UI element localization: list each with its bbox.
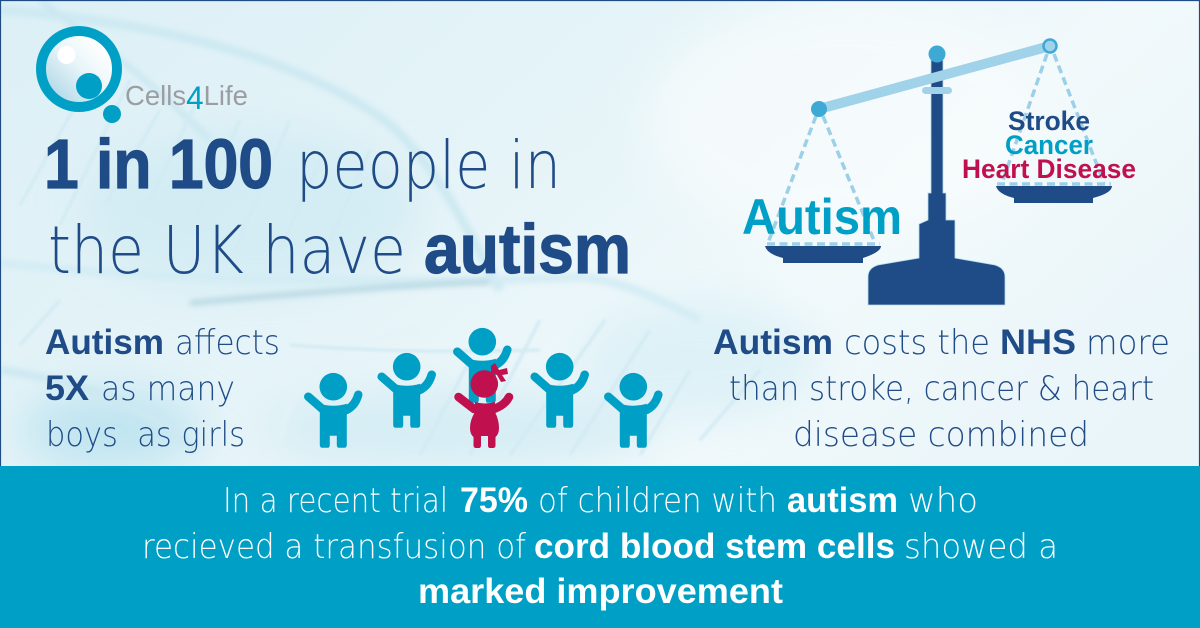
banner text: of children with: [538, 481, 777, 521]
text: boys vs girls: affects: [175, 323, 280, 363]
title: autism: [424, 210, 631, 288]
banner text: cord blood stem cells: [534, 527, 895, 566]
banner text: [142, 481, 1058, 611]
banner text: recieved a transfusion of: [142, 527, 526, 567]
logo: Cells4Life: Life: [204, 80, 248, 111]
panel: bottom banner: [0, 466, 1200, 628]
banner text: 75%: [460, 481, 528, 520]
logo: Cells4Life: 4: [186, 80, 204, 116]
banner text: marked improvement: [418, 572, 783, 611]
icon: children group: [308, 328, 658, 448]
title: 1 in 100: [44, 125, 273, 203]
logo: Cells4Life: Cells: [125, 80, 187, 111]
label: Cancer: Cancer: [1005, 130, 1093, 160]
text: NHS costs: costs the: [844, 323, 990, 363]
text: boys vs girls: boys as girls: [46, 415, 245, 455]
label: Heart Disease: Heart Disease: [962, 154, 1136, 184]
text: boys vs girls: [45, 323, 280, 455]
title: [44, 125, 631, 289]
text: NHS costs: Autism: [713, 323, 833, 362]
right pan: [996, 186, 1112, 203]
banner text: showed a: [904, 527, 1058, 567]
banner text: who: [908, 481, 978, 521]
scale stand: [868, 60, 1005, 305]
text: NHS costs: more: [1086, 323, 1170, 363]
icon: girl: [458, 363, 509, 448]
scale beam: [819, 46, 1050, 109]
text: NHS costs: [713, 323, 1170, 455]
text: NHS costs: than stroke, cancer & heart: [729, 369, 1154, 409]
text: boys vs girls: 5X: [45, 369, 90, 408]
pan chains: [767, 54, 1111, 244]
left pan: [765, 246, 881, 263]
scale illustration: [742, 40, 1136, 305]
title: people in: [296, 127, 561, 204]
text: boys vs girls: as many: [101, 369, 235, 409]
text: boys vs girls: Autism: [45, 323, 164, 362]
frame border: [0, 0, 1200, 466]
text: NHS costs: NHS: [1000, 323, 1076, 362]
label: Autism: Autism: [742, 189, 902, 245]
text: NHS costs: disease combined: [793, 415, 1089, 455]
banner text: autism: [787, 481, 898, 520]
banner text: In a recent trial: [223, 481, 448, 521]
logo: Cells4Life: [41, 31, 248, 123]
title: the UK have: [48, 212, 406, 289]
label: Stroke: Stroke: [1008, 106, 1090, 136]
